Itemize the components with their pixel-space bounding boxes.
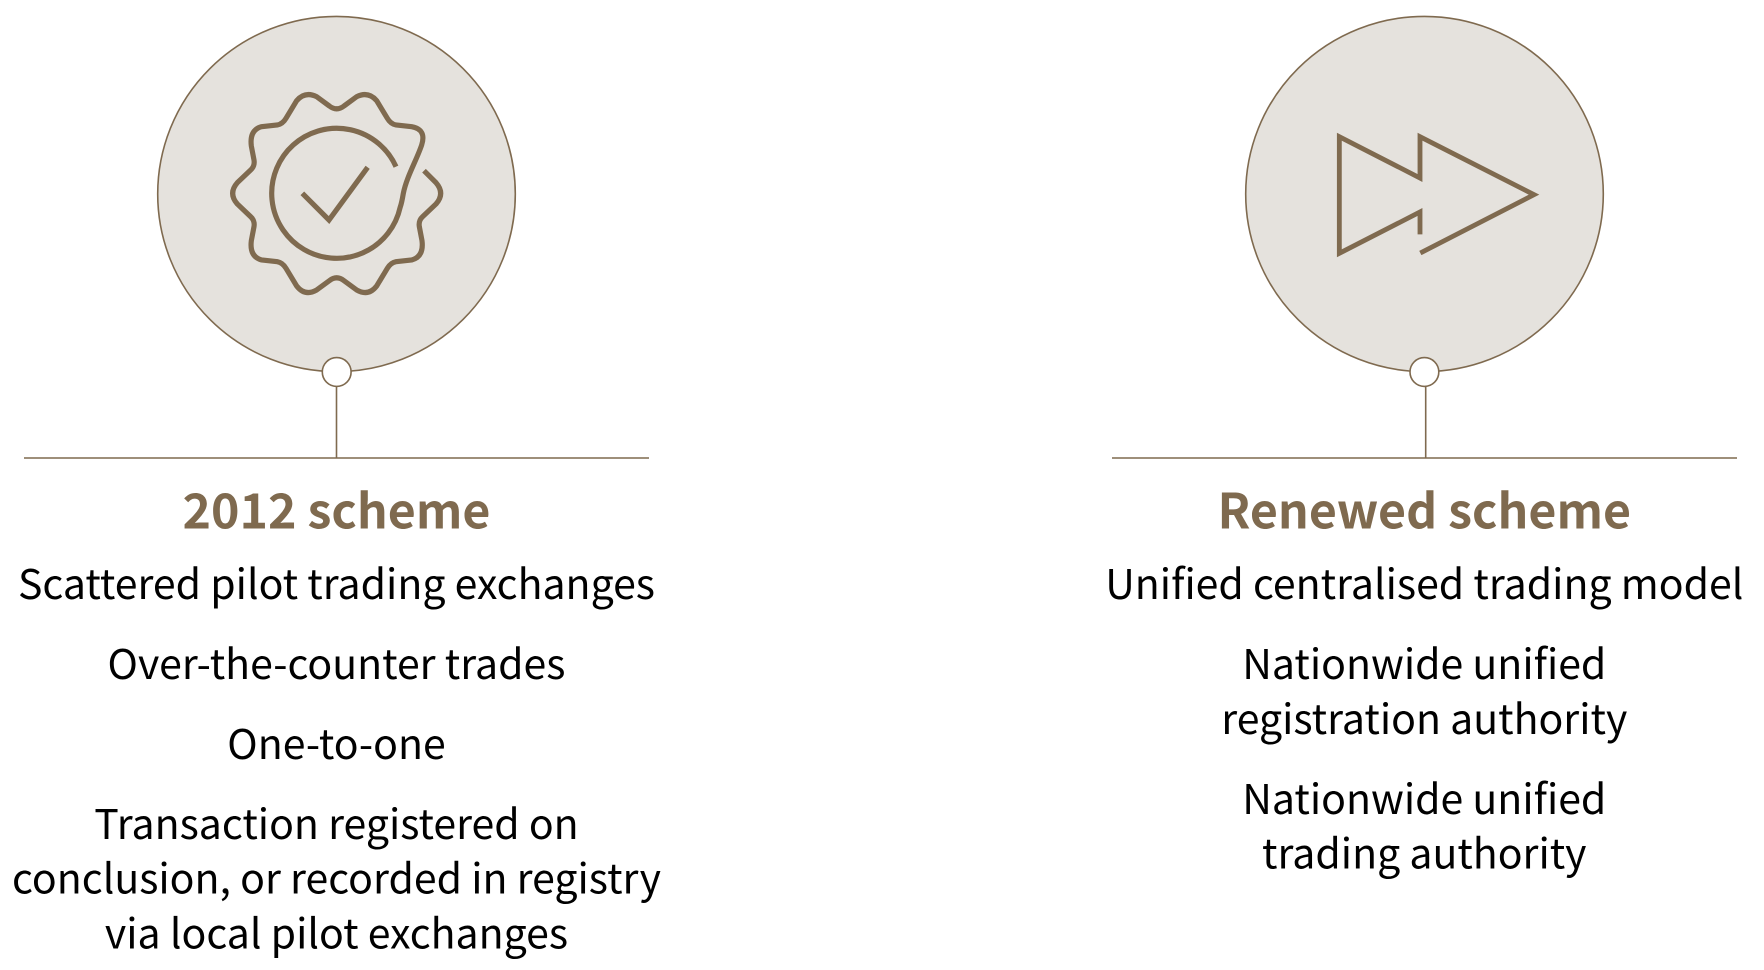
heading: 2012 scheme: 2012 scheme: [183, 472, 490, 542]
text: transaction registration: [12, 791, 661, 960]
connector: node and stem to divider: [322, 358, 351, 458]
icon: badge with check mark: [233, 95, 441, 293]
connector: node and stem to divider: [1410, 358, 1439, 458]
text: transaction registration: Transaction registered on: [94, 791, 579, 851]
divider line: [1112, 457, 1737, 459]
heading: renewed scheme: Renewed scheme: [1217, 472, 1631, 542]
text: nationwide trading authority: [1242, 766, 1606, 880]
icon: fast-forward arrows: [1339, 137, 1534, 253]
icon circle: 2012 scheme: [158, 16, 515, 372]
text: one-to-one: One-to-one: [227, 711, 446, 771]
divider line: [24, 457, 649, 459]
text: nationwide registration authority: registration authority: [1221, 686, 1627, 746]
icon circle: renewed scheme: [1246, 16, 1603, 372]
text: nationwide registration authority: Nationwide unified: [1242, 631, 1606, 691]
panel: 2012 scheme: [12, 16, 661, 960]
text: nationwide registration authority: [1221, 631, 1627, 746]
text: scattered pilot trading exchanges: Scattered pilot trading exchanges: [18, 551, 655, 611]
text: over-the-counter trades: Over-the-counter trades: [108, 631, 565, 691]
text: transaction registration: via local pilot exchanges: [105, 900, 568, 960]
text: transaction registration: conclusion, or recorded in registry: [12, 846, 661, 906]
text: unified centralised trading model: Unified centralised trading model: [1105, 551, 1743, 611]
panel: renewed scheme: [1105, 16, 1743, 880]
text: nationwide trading authority: Nationwide unified: [1242, 766, 1606, 826]
text: nationwide trading authority: trading authority: [1262, 820, 1587, 880]
